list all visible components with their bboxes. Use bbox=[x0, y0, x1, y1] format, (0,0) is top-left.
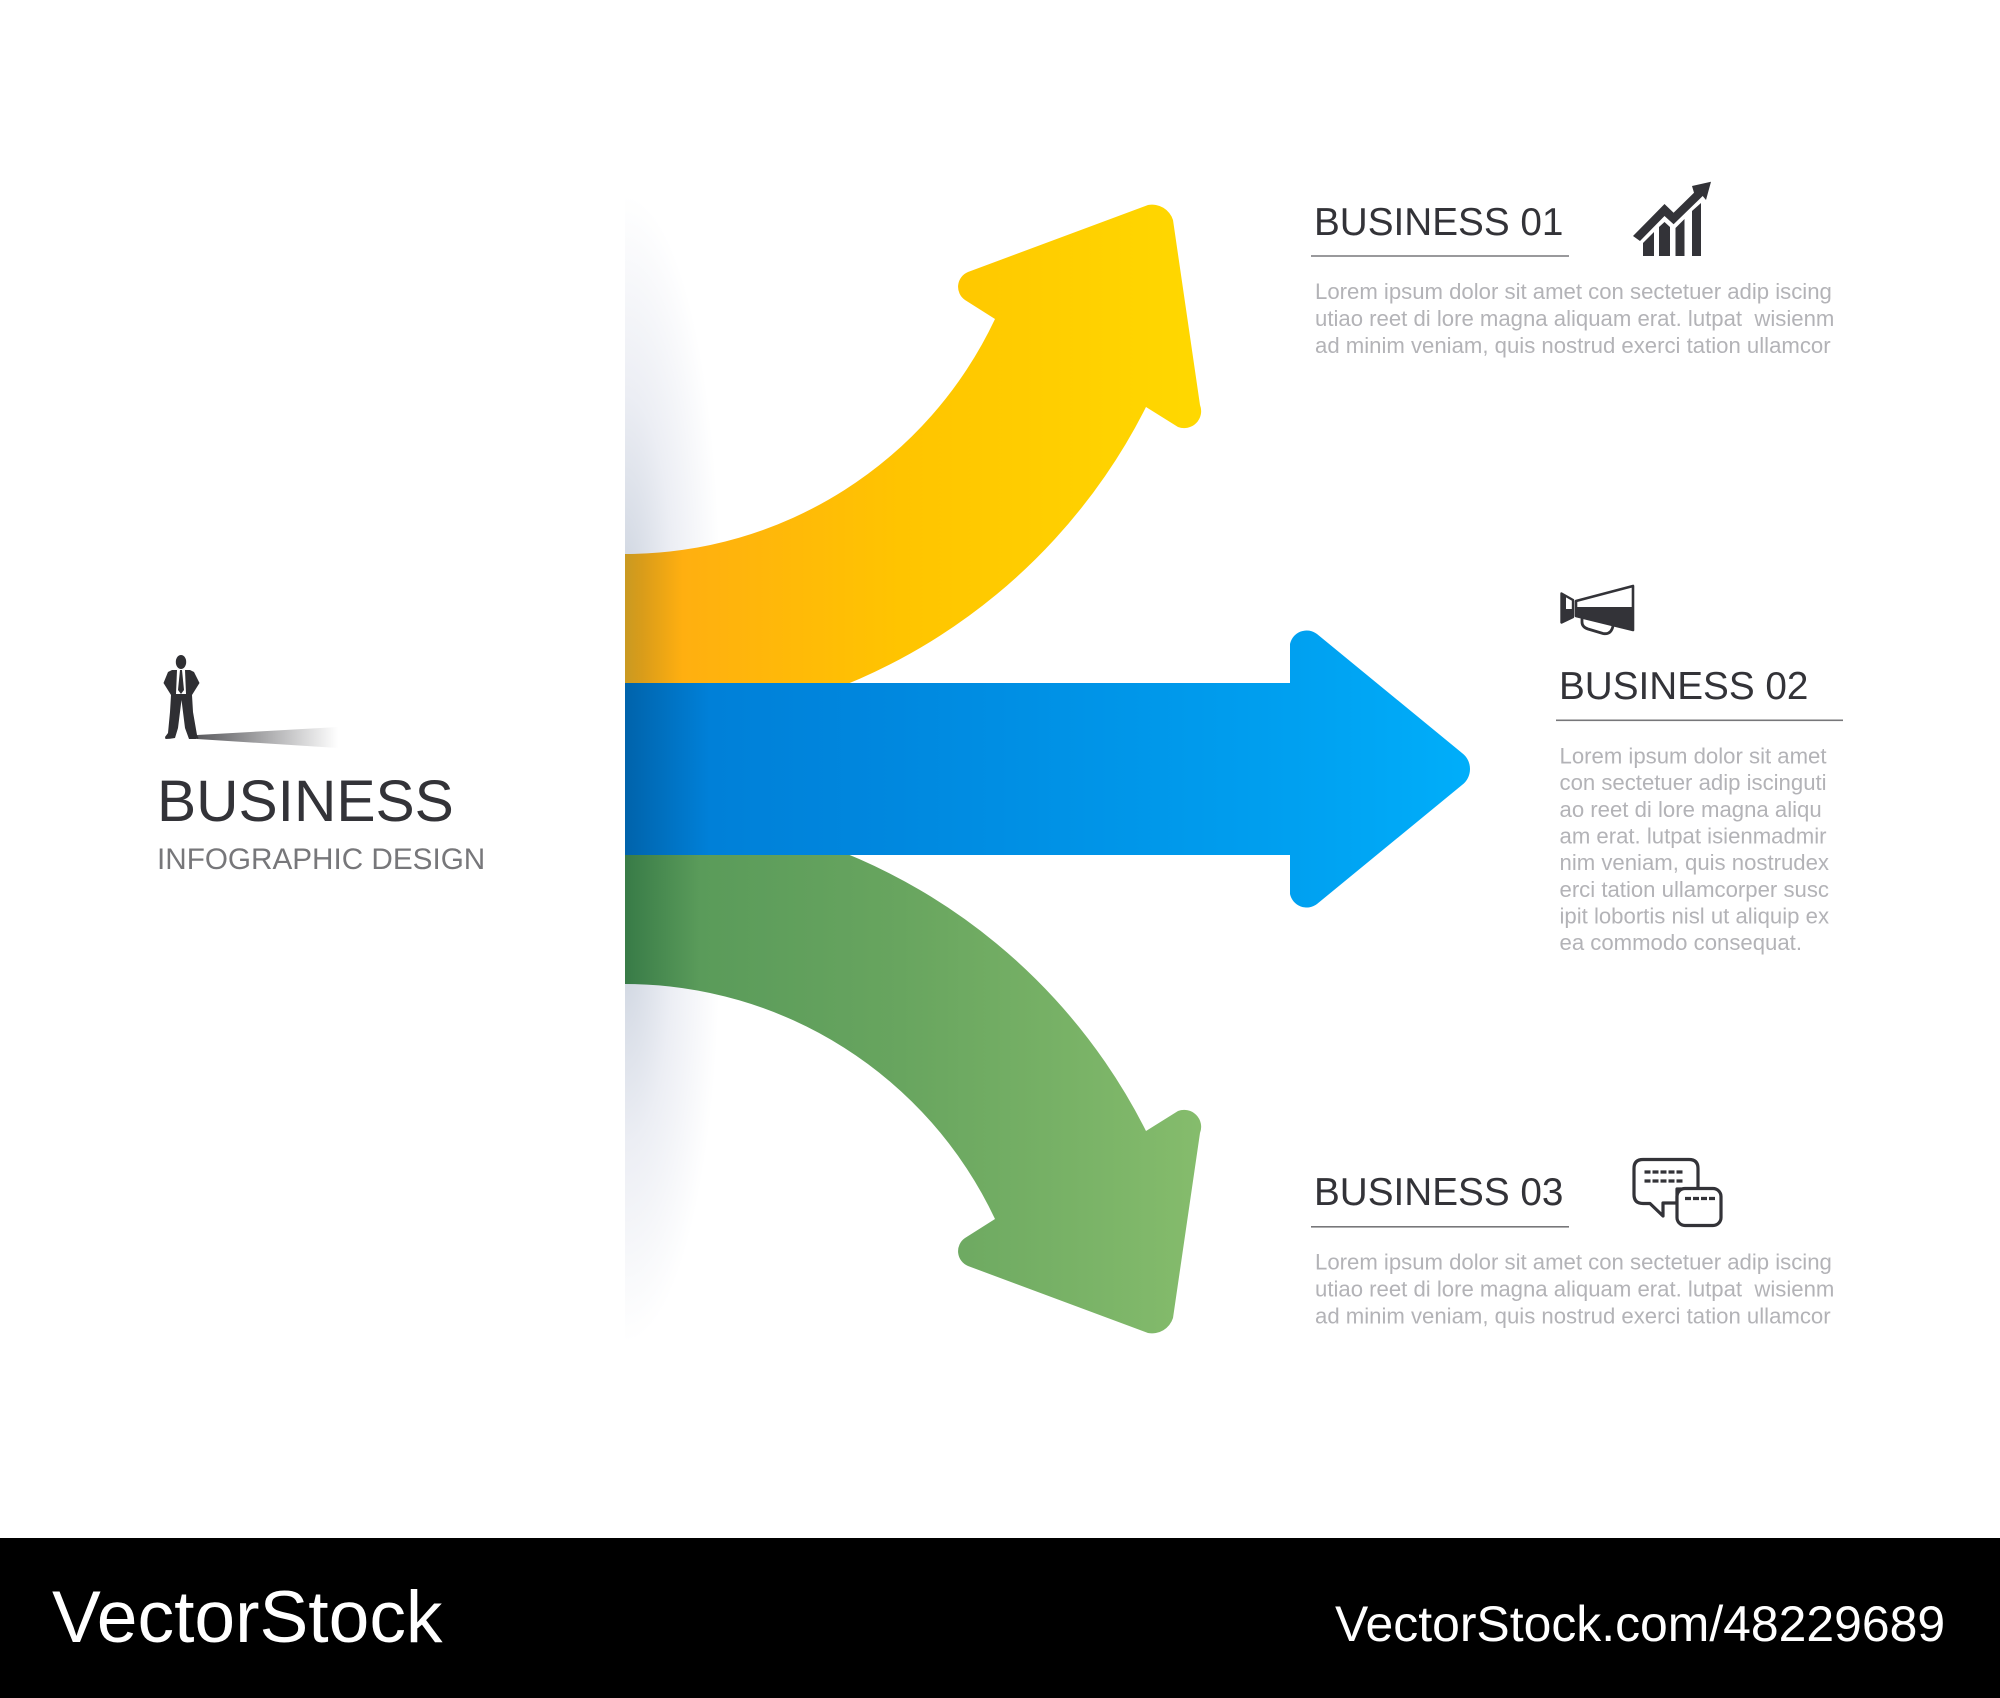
text block: business 02 body: ipit lobortis nisl ut aliquip ex bbox=[1560, 904, 1829, 928]
footer url text: VectorStock.com/48229689 bbox=[1335, 1596, 1945, 1652]
arrow: green curving down bbox=[625, 810, 1201, 1333]
panel: business 03 bbox=[1311, 1160, 1834, 1328]
text block: business 01 body: Lorem ipsum dolor sit amet con sectetuer adip iscing bbox=[1315, 279, 1832, 304]
text block: business 02 body: con sectetuer adip iscinguti bbox=[1560, 770, 1827, 795]
text block: business 01 body: utiao reet di lore magna aliquam erat. lutpat wisienm bbox=[1315, 306, 1834, 331]
text block: business 02 body: erci tation ullamcorper susc bbox=[1560, 877, 1829, 902]
icon: megaphone bbox=[1561, 586, 1634, 634]
heading: business 03: BUSINESS 03 bbox=[1314, 1171, 1563, 1214]
icon: rising chart bbox=[1633, 182, 1711, 256]
text block: business 02 body: Lorem ipsum dolor sit amet bbox=[1560, 744, 1827, 768]
panel: business 02 bbox=[1556, 586, 1843, 955]
arrow: yellow curving up bbox=[625, 205, 1201, 728]
panel: business 01 bbox=[1311, 182, 1834, 358]
text block: business 01 body: ad minim veniam, quis nostrud exerci tation ullamcor bbox=[1315, 333, 1831, 358]
text block: business 02 body: am erat. lutpat isienmadmir bbox=[1560, 824, 1827, 848]
icon: businessman with shadow bbox=[164, 655, 338, 748]
heading: business 01: BUSINESS 01 bbox=[1314, 201, 1563, 244]
subtitle: INFOGRAPHIC DESIGN: INFOGRAPHIC DESIGN bbox=[157, 843, 485, 876]
text block: business 02 body: nim veniam, quis nostrudex bbox=[1560, 850, 1829, 875]
footer logo text: VectorStock bbox=[52, 1576, 443, 1658]
footer banner bbox=[0, 1538, 2000, 1698]
text block: business 03 body: Lorem ipsum dolor sit amet con sectetuer adip iscing bbox=[1315, 1250, 1832, 1274]
text block: business 02 body: ea commodo consequat. bbox=[1560, 930, 1802, 955]
text block: business 03 body: ad minim veniam, quis nostrud exerci tation ullamcor bbox=[1315, 1304, 1831, 1328]
fold shadow below green arrow bbox=[625, 978, 735, 1348]
icon: chat bubbles bbox=[1634, 1160, 1721, 1226]
arrow: blue straight bbox=[625, 630, 1470, 908]
text block: business 03 body: utiao reet di lore magna aliquam erat. lutpat wisienm bbox=[1315, 1276, 1834, 1302]
title: BUSINESS: BUSINESS bbox=[157, 769, 454, 834]
heading: business 02: BUSINESS 02 bbox=[1559, 665, 1808, 708]
fold shadow above yellow arrow bbox=[625, 190, 735, 560]
text block: business 02 body: ao reet di lore magna aliqu bbox=[1560, 797, 1822, 822]
